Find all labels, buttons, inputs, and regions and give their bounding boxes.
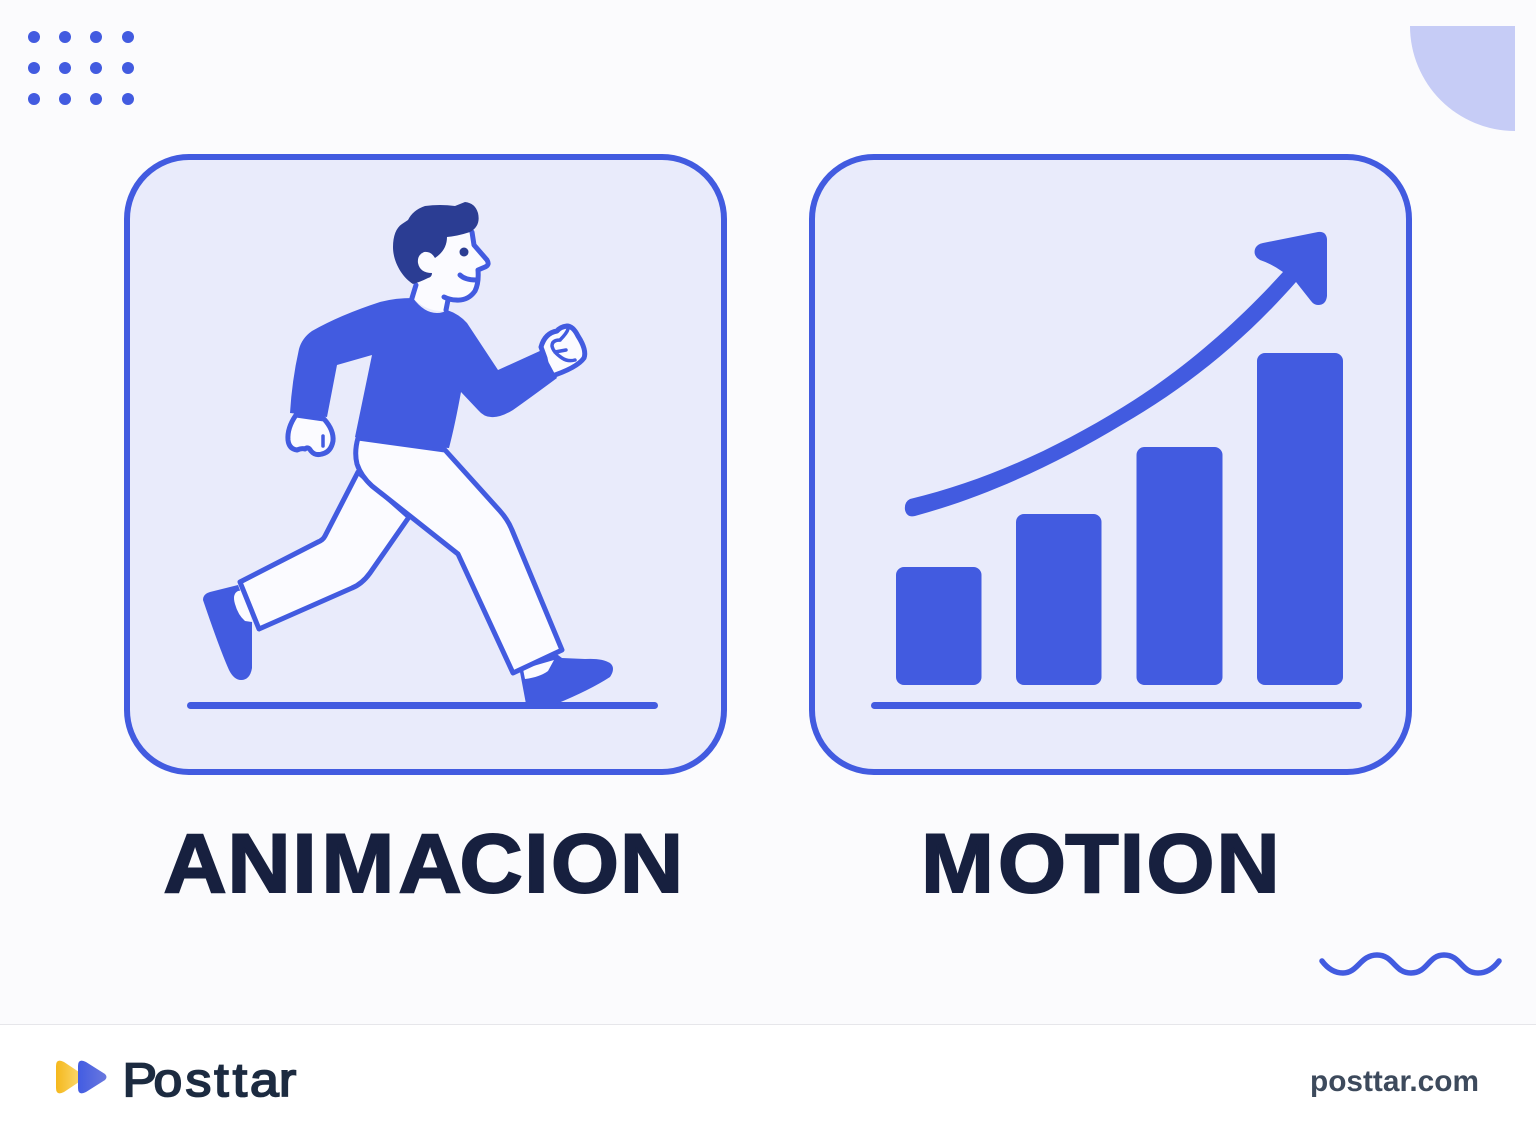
footer [0, 1024, 1536, 1136]
back leg [240, 472, 409, 629]
logo icon [56, 1061, 106, 1093]
front shoe [520, 652, 613, 704]
logo wordmark: Posttar [123, 1054, 296, 1106]
panel: animacion [127, 157, 724, 772]
back shoe [203, 585, 252, 680]
ground line [187, 702, 658, 709]
icon: running person [203, 202, 613, 704]
front leg [356, 438, 562, 673]
front hand [541, 326, 585, 377]
hair [393, 202, 479, 284]
title: animacion: ANIMACION [163, 817, 683, 911]
head [393, 202, 488, 311]
ground line [871, 702, 1362, 709]
decorative quarter circle [1410, 26, 1515, 131]
back hand [288, 415, 333, 455]
title: motion: MOTION [921, 817, 1280, 911]
decorative wave [1322, 955, 1499, 973]
website url: posttar.com [1310, 1065, 1479, 1098]
arrow: growth curve [905, 232, 1327, 516]
panel: motion [812, 157, 1409, 772]
decorative dot grid [28, 31, 134, 105]
sweater [290, 298, 557, 448]
bar chart [896, 353, 1343, 685]
eye [460, 248, 468, 256]
